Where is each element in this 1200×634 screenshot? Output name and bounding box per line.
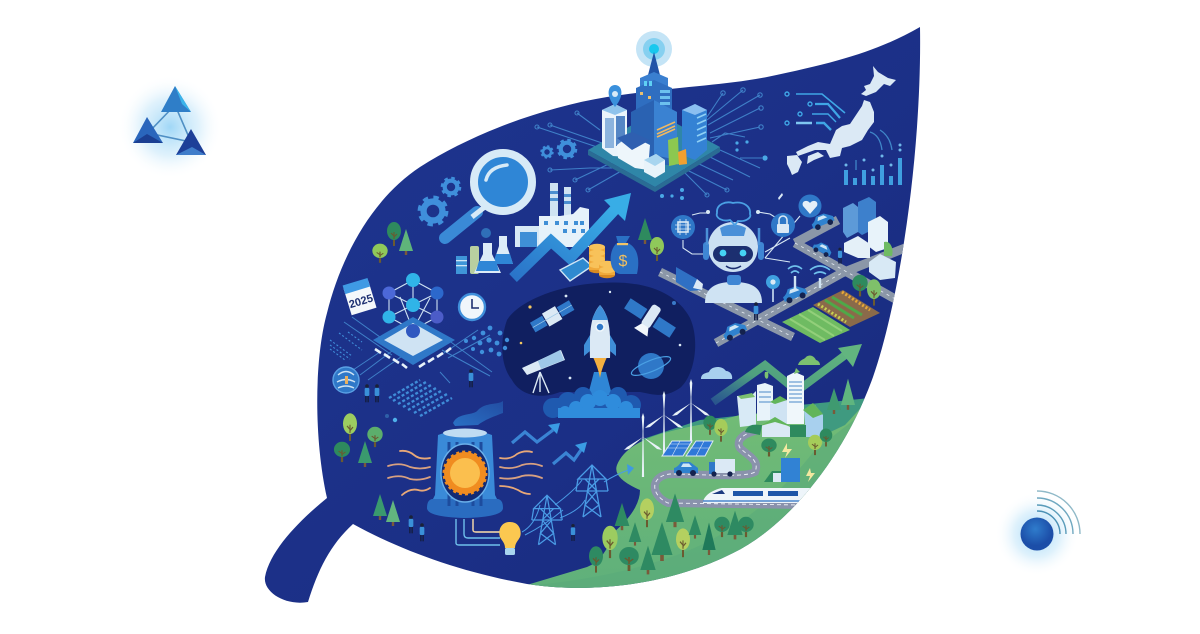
icon: trees upper left <box>372 222 413 263</box>
icon: satellite left <box>529 299 575 334</box>
icon: buildings right <box>843 197 896 280</box>
icon: clock <box>459 294 485 320</box>
icon: planet <box>629 353 673 379</box>
icon: map of Japan <box>778 66 896 200</box>
icon: car and truck <box>674 459 735 477</box>
chart: dot cluster <box>464 326 509 356</box>
icon: solar-powered building <box>764 443 815 482</box>
icon: trees and people bottom left <box>373 494 424 541</box>
chart: signal bar columns <box>844 130 902 185</box>
icon: vehicles on roads <box>676 211 836 343</box>
icon: trees left <box>334 413 383 467</box>
icon: chip badge <box>671 215 695 239</box>
icon: telescope <box>522 350 565 393</box>
icon: launch clouds <box>543 387 641 418</box>
icon: pipes and light bulb <box>456 519 521 555</box>
icon: solar panels <box>662 441 713 456</box>
icon: trees by fields <box>638 218 881 306</box>
icon: power pylons <box>522 464 634 545</box>
icon: satellite right <box>618 292 680 347</box>
chart: data dot grids <box>330 332 452 416</box>
icon: forest upper trees <box>703 379 855 456</box>
icon: wind turbines <box>624 379 710 477</box>
icon: magnifying glass <box>445 153 532 238</box>
panel: leaf shape <box>265 27 920 603</box>
icon: calendar 2025: 2025 <box>348 293 375 311</box>
icon: smart city tower <box>588 31 720 192</box>
icon: flasks <box>456 228 513 274</box>
arrow: green growth zigzag <box>713 344 862 402</box>
chart: circuit lines around city <box>535 88 763 197</box>
icon: people near robot <box>754 248 842 320</box>
icon: money and coins: $ <box>619 253 628 270</box>
icon: wifi and map pin <box>766 266 830 302</box>
icon: microchip <box>344 317 492 383</box>
icon: people left <box>365 369 473 422</box>
icon: money and coins <box>560 236 638 281</box>
icon: rocket <box>584 305 616 395</box>
icon: heart badge <box>798 194 822 218</box>
icon: calendar 2025 <box>343 278 377 315</box>
icon: person by pylons <box>571 524 575 541</box>
icon: lock badge <box>771 213 795 237</box>
icon: farm fields <box>782 290 880 343</box>
chart: data stream lines <box>785 92 845 130</box>
infographic: leaf of technology and society <box>130 27 1081 603</box>
icon: triangle network <box>118 75 222 179</box>
panel: green landscape <box>529 398 864 588</box>
icon: isometric roads <box>660 220 905 343</box>
icon: brain scan circle <box>333 367 359 393</box>
arrow: small rising arrows <box>512 423 587 464</box>
icon: stars <box>520 291 681 379</box>
icon: heat waves <box>388 451 542 495</box>
icon: sky clouds <box>701 356 820 379</box>
icon: signal orb <box>995 491 1080 576</box>
icon: forest lower trees <box>589 493 754 574</box>
icon: green city <box>737 368 823 437</box>
panel: leaf contents <box>330 66 905 620</box>
icon: factory <box>515 183 589 247</box>
icon: gears by magnifier <box>420 178 460 224</box>
icon: bullet train <box>703 488 810 503</box>
icon: robot with brain <box>683 202 800 303</box>
arrow: growth zigzag blue <box>513 193 631 278</box>
icon: upper small gears <box>541 140 576 158</box>
icon: scattered node dots <box>660 140 768 200</box>
icon: road winding <box>655 430 800 505</box>
icon: dark space cloud <box>502 282 695 396</box>
chart: molecule network <box>382 273 444 324</box>
icon: fusion reactor <box>427 401 503 518</box>
